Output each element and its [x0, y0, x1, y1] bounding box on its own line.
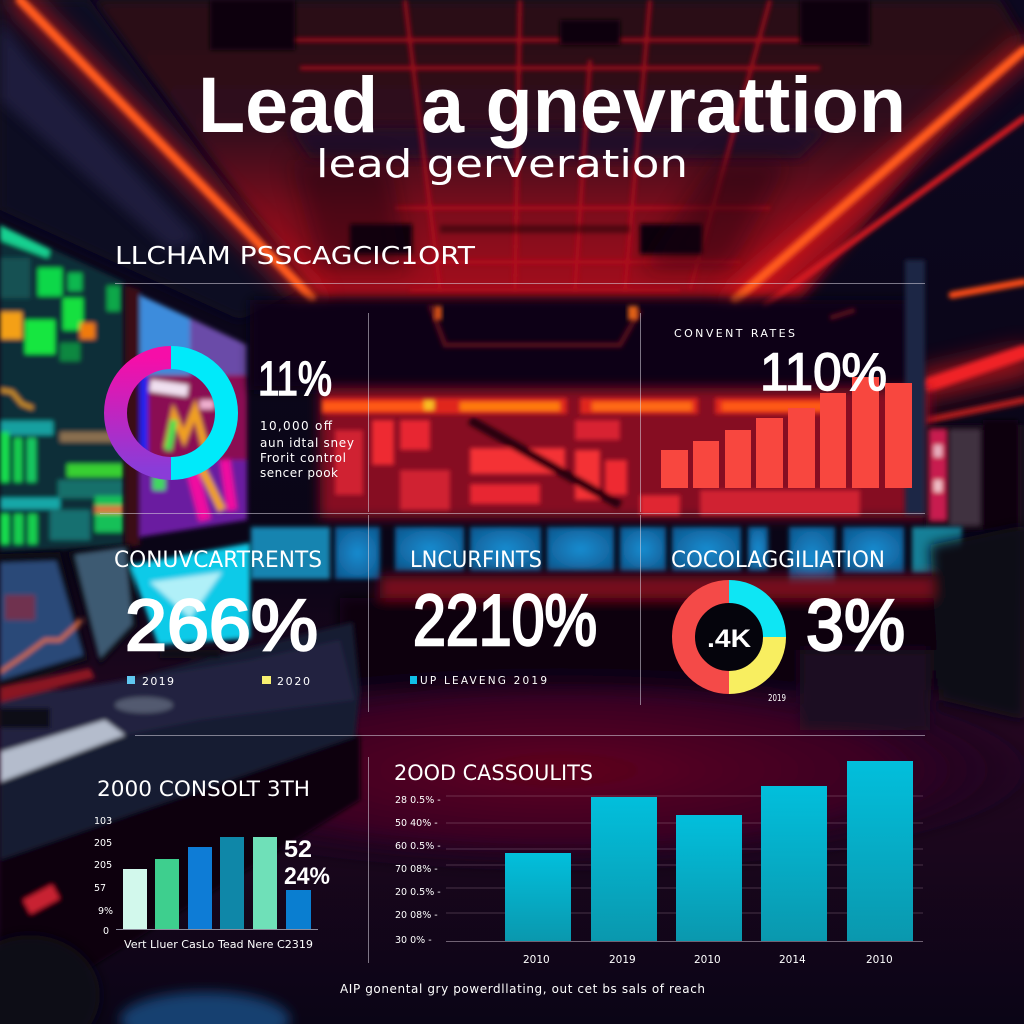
left desk and monitors — [0, 543, 360, 1024]
title: Lead a gnevrattion — [198, 60, 906, 149]
stat value: 2210% — [413, 581, 597, 661]
ceiling — [0, 0, 1024, 320]
neon stripes — [20, 0, 1024, 420]
y axis labels: 103 — [94, 816, 112, 827]
y axis labels: 60 0.5% - — [395, 841, 441, 852]
y axis labels: 205 — [94, 860, 112, 871]
section heading: LLCHAM PSSCAGCIC1ORT — [115, 241, 476, 270]
stat value: 3% — [806, 586, 905, 666]
x axis labels: 2010 — [523, 954, 550, 966]
y axis labels: 0 — [103, 926, 109, 937]
panel: donut metric 11% — [116, 353, 354, 480]
bars — [123, 837, 311, 929]
legend — [410, 676, 417, 684]
axis line — [116, 928, 318, 930]
right side pillar and wall — [905, 260, 1024, 530]
foreground chair — [0, 935, 290, 1024]
x axis labels: 2010 — [866, 954, 893, 966]
bar callout values: 52 — [284, 836, 312, 863]
y axis labels: 30 0% - — [395, 935, 432, 946]
far left screen wall — [0, 225, 124, 552]
y axis labels: 28 0.5% - — [395, 795, 441, 806]
x axis labels: 2014 — [779, 954, 806, 966]
legend label: UP LEAVENG 2019 — [420, 675, 547, 687]
stat description: sencer pook — [260, 466, 338, 480]
footer note: AIP gonental gry powerdllating, out cet bs sals of reach — [340, 982, 705, 996]
y axis labels — [395, 795, 441, 946]
panel: large bar chart — [394, 761, 923, 966]
stat value: 266% — [125, 586, 318, 666]
donut chart: magenta and cyan — [116, 358, 227, 468]
stat description — [260, 419, 354, 480]
panel: convent rates bar chart — [661, 327, 912, 488]
y axis labels: 50 40% - — [395, 818, 438, 829]
cyan bars — [505, 761, 913, 941]
red bars — [661, 377, 912, 488]
x axis labels: Vert Lluer CasLo Tead Nere C2319 — [124, 939, 313, 951]
y axis labels: 20 0.5% - — [395, 887, 441, 898]
panel: conversions stat — [114, 548, 322, 688]
stat value: 11% — [258, 353, 332, 406]
panel: collaboration donut — [671, 548, 905, 704]
y axis labels: 70 08% - — [395, 864, 438, 875]
panel heading: CONUVCARTRENTS — [114, 548, 322, 573]
subtitle: lead gerveration — [316, 142, 688, 186]
y axis labels: 9% — [98, 906, 113, 917]
panel: small bar chart: 24% — [284, 863, 330, 890]
x axis labels: 2019 — [609, 954, 636, 966]
donut centre value: .4K — [707, 625, 751, 653]
y axis labels: 57 — [94, 883, 106, 894]
x axis labels: 2010 — [694, 954, 721, 966]
stat description: 10,000 off — [260, 419, 333, 433]
panel heading: 2OOD CASSOULITS — [394, 761, 593, 785]
y axis labels: 205 — [94, 838, 112, 849]
grid lines — [446, 796, 923, 913]
axis line — [446, 940, 923, 942]
panel heading: COCOLAGGILIATION — [671, 548, 885, 573]
legend — [127, 675, 310, 688]
central red wall — [250, 300, 930, 518]
legend: 2020 — [277, 675, 310, 688]
year label: 2019 — [768, 693, 786, 704]
stat value: 110% — [760, 343, 887, 402]
stat description: aun idtal sney — [260, 436, 354, 450]
legend: 2019 — [142, 675, 174, 688]
grid divider lines — [100, 284, 925, 963]
magenta screen — [125, 285, 247, 548]
panel heading: LNCURFINTS — [410, 548, 542, 573]
panel heading: 2000 CONSOLT 3TH — [97, 777, 310, 801]
panel: small bar chart — [94, 777, 330, 951]
stat description: Frorit control — [260, 451, 346, 465]
x axis labels — [523, 954, 893, 966]
panel: leads stat — [410, 548, 597, 687]
panel label: CONVENT RATES — [674, 327, 795, 340]
desks and floor — [70, 525, 1024, 875]
monitor row — [251, 527, 962, 587]
y axis labels — [94, 816, 113, 937]
donut chart — [684, 592, 774, 682]
y axis labels: 20 08% - — [395, 910, 438, 921]
